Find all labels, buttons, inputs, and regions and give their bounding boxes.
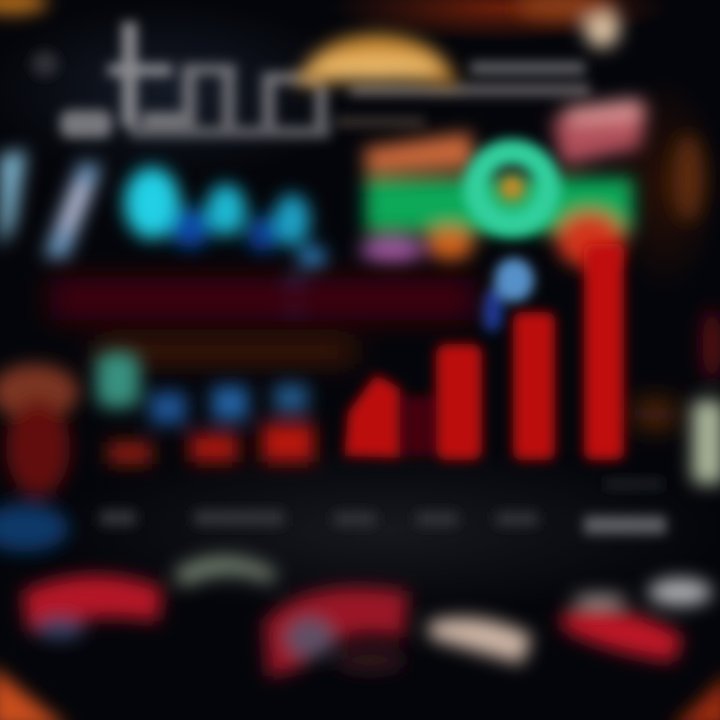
- bottom shapes: red and white cards: [22, 555, 712, 678]
- donut chart panel: [360, 98, 648, 332]
- bar chart: red bars: [344, 244, 624, 460]
- small bars: blue and red: [96, 352, 314, 464]
- left panel: cyan circles: [0, 150, 326, 314]
- icon: donut ring: [476, 152, 548, 332]
- table rows: faint labels: [100, 480, 666, 534]
- title: blurred heading letters: [31, 22, 590, 138]
- dark red band: [50, 278, 675, 424]
- right edge accents: [672, 134, 720, 484]
- title dome highlight: [296, 34, 458, 86]
- left side blob: [0, 364, 79, 552]
